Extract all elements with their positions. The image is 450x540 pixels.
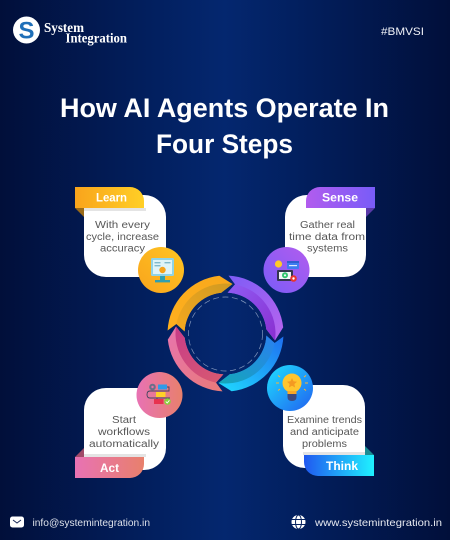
cycle ring of four arrows [168,276,283,391]
panel: Act: workflows [97,427,150,438]
panel: Think: problems [302,439,347,450]
logo: System Integration: System [44,21,84,36]
panel: Think: Think [326,461,359,473]
panel: Act: Act [100,463,119,475]
title [60,93,389,159]
panel: Learn: With every [95,220,150,231]
panel: Act: Start [112,415,136,426]
logo: System Integration: S [18,18,35,44]
icon: workflow [136,372,182,418]
logo: System Integration [13,16,127,46]
panel: Learn [75,187,166,277]
icon: data systems [264,247,310,293]
logo: System Integration: Integration [66,30,127,46]
icon: monitor with book [138,247,184,293]
panel: Sense: Gather real [300,220,355,231]
panel: Sense [285,187,375,277]
title: Four Steps [156,129,293,159]
panel: Sense: systems [307,244,348,254]
panel: Think: Examine trends [287,415,362,426]
footer: website: www.systemintegration.in [314,517,442,529]
panel: Learn: accuracy [100,244,145,254]
panel: Act: automatically [89,439,159,450]
hashtag: #BMVSI [381,26,424,38]
icon: light bulb [267,365,313,411]
panel: Think: and anticipate [290,427,360,438]
panel: Learn: Learn [96,192,127,204]
panel: Sense: Sense [322,192,358,204]
panel: Sense: time data from [289,232,365,243]
panel: Act [75,388,166,478]
title: How AI Agents Operate In [60,93,389,123]
panel: Think [283,385,374,476]
footer: email: info@systemintegration.in [32,518,150,529]
panel: Learn: cycle, increase [86,232,160,243]
footer: website [292,515,442,529]
